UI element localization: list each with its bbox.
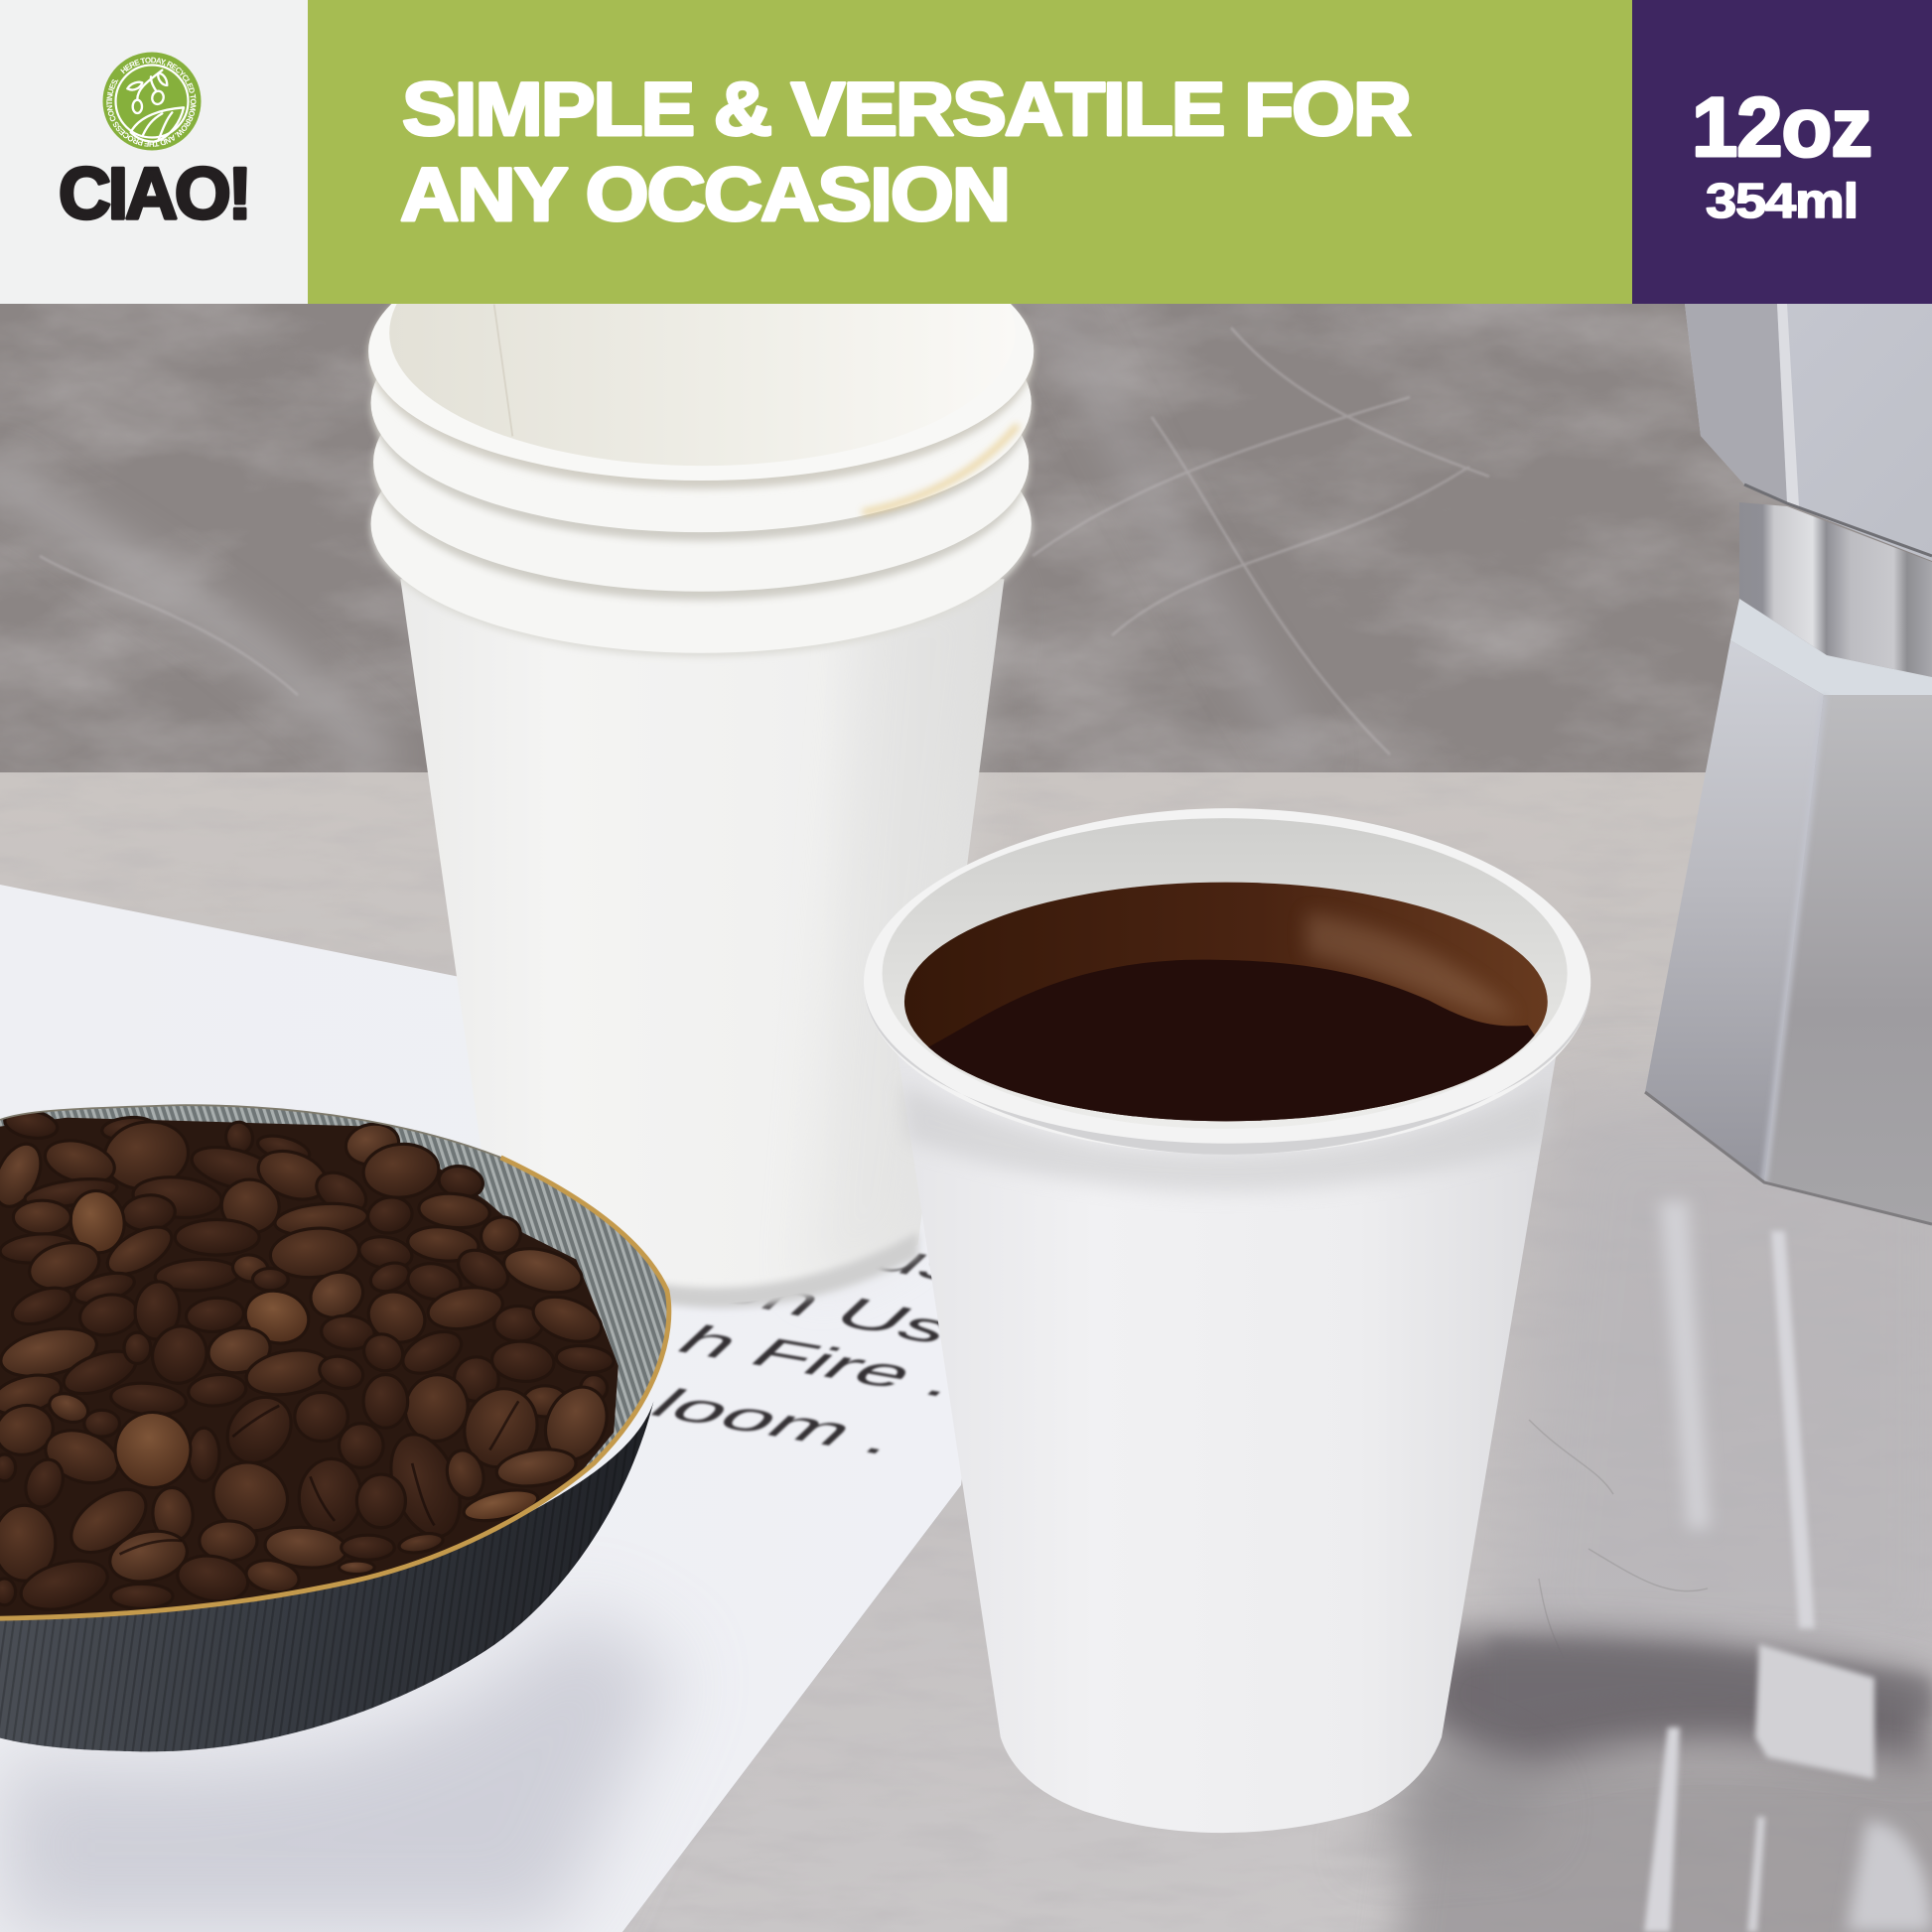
front paper cup with coffee bbox=[863, 808, 1601, 1833]
stacked rims bbox=[364, 304, 1037, 659]
front cup rim bbox=[864, 808, 1590, 1155]
cup shadow and reflections on table bbox=[1410, 1201, 1932, 1932]
stack of white paper cups bbox=[368, 200, 1034, 1308]
brand wordmark: CIAO! bbox=[59, 154, 249, 234]
inner wall bbox=[883, 818, 1568, 1129]
size in ounces: 12oz bbox=[1692, 80, 1871, 174]
headline: ANY OCCASION bbox=[400, 153, 1009, 237]
printed text on paper: loom . bbox=[636, 1381, 918, 1462]
white paper card bbox=[0, 885, 1013, 1932]
black bowl of coffee beans bbox=[0, 1105, 669, 1751]
printed text on paper: h Fire . bbox=[663, 1317, 979, 1405]
headline: SIMPLE & VERSATILE FOR bbox=[402, 68, 1411, 152]
coffee surface bbox=[904, 883, 1548, 1121]
metal band bbox=[1739, 502, 1932, 677]
header bar bbox=[0, 0, 1932, 304]
bowl exterior bbox=[0, 1401, 653, 1751]
marble table bbox=[0, 772, 1932, 1932]
cup opening bbox=[389, 200, 1016, 466]
coffee beans bbox=[0, 1107, 619, 1658]
pot lid section bbox=[1685, 304, 1932, 561]
printed text on paper: us bbox=[855, 1234, 992, 1291]
marble wall bbox=[0, 298, 1932, 774]
front cup body bbox=[897, 1047, 1558, 1833]
printed text on paper: on Us bbox=[699, 1264, 970, 1352]
bowl interior bbox=[0, 1105, 669, 1618]
logo panel bbox=[0, 0, 308, 304]
headline panel bbox=[308, 0, 1632, 304]
cup stack body bbox=[400, 579, 1004, 1304]
printed text on paper bbox=[650, 1252, 941, 1455]
capacity panel bbox=[1632, 0, 1932, 304]
headline bbox=[400, 68, 1411, 237]
pot base section bbox=[1645, 640, 1824, 1182]
size in millilitres: 354ml bbox=[1706, 175, 1858, 228]
cup shadow on table bbox=[1355, 1725, 1544, 1861]
moka pot bbox=[1645, 304, 1932, 1224]
recycling seal icon: HERE TODAY, RECYCLED TOMORROW. AND THE PROCESS CONTINUES. bbox=[106, 58, 197, 147]
gold rim bbox=[0, 1158, 669, 1618]
